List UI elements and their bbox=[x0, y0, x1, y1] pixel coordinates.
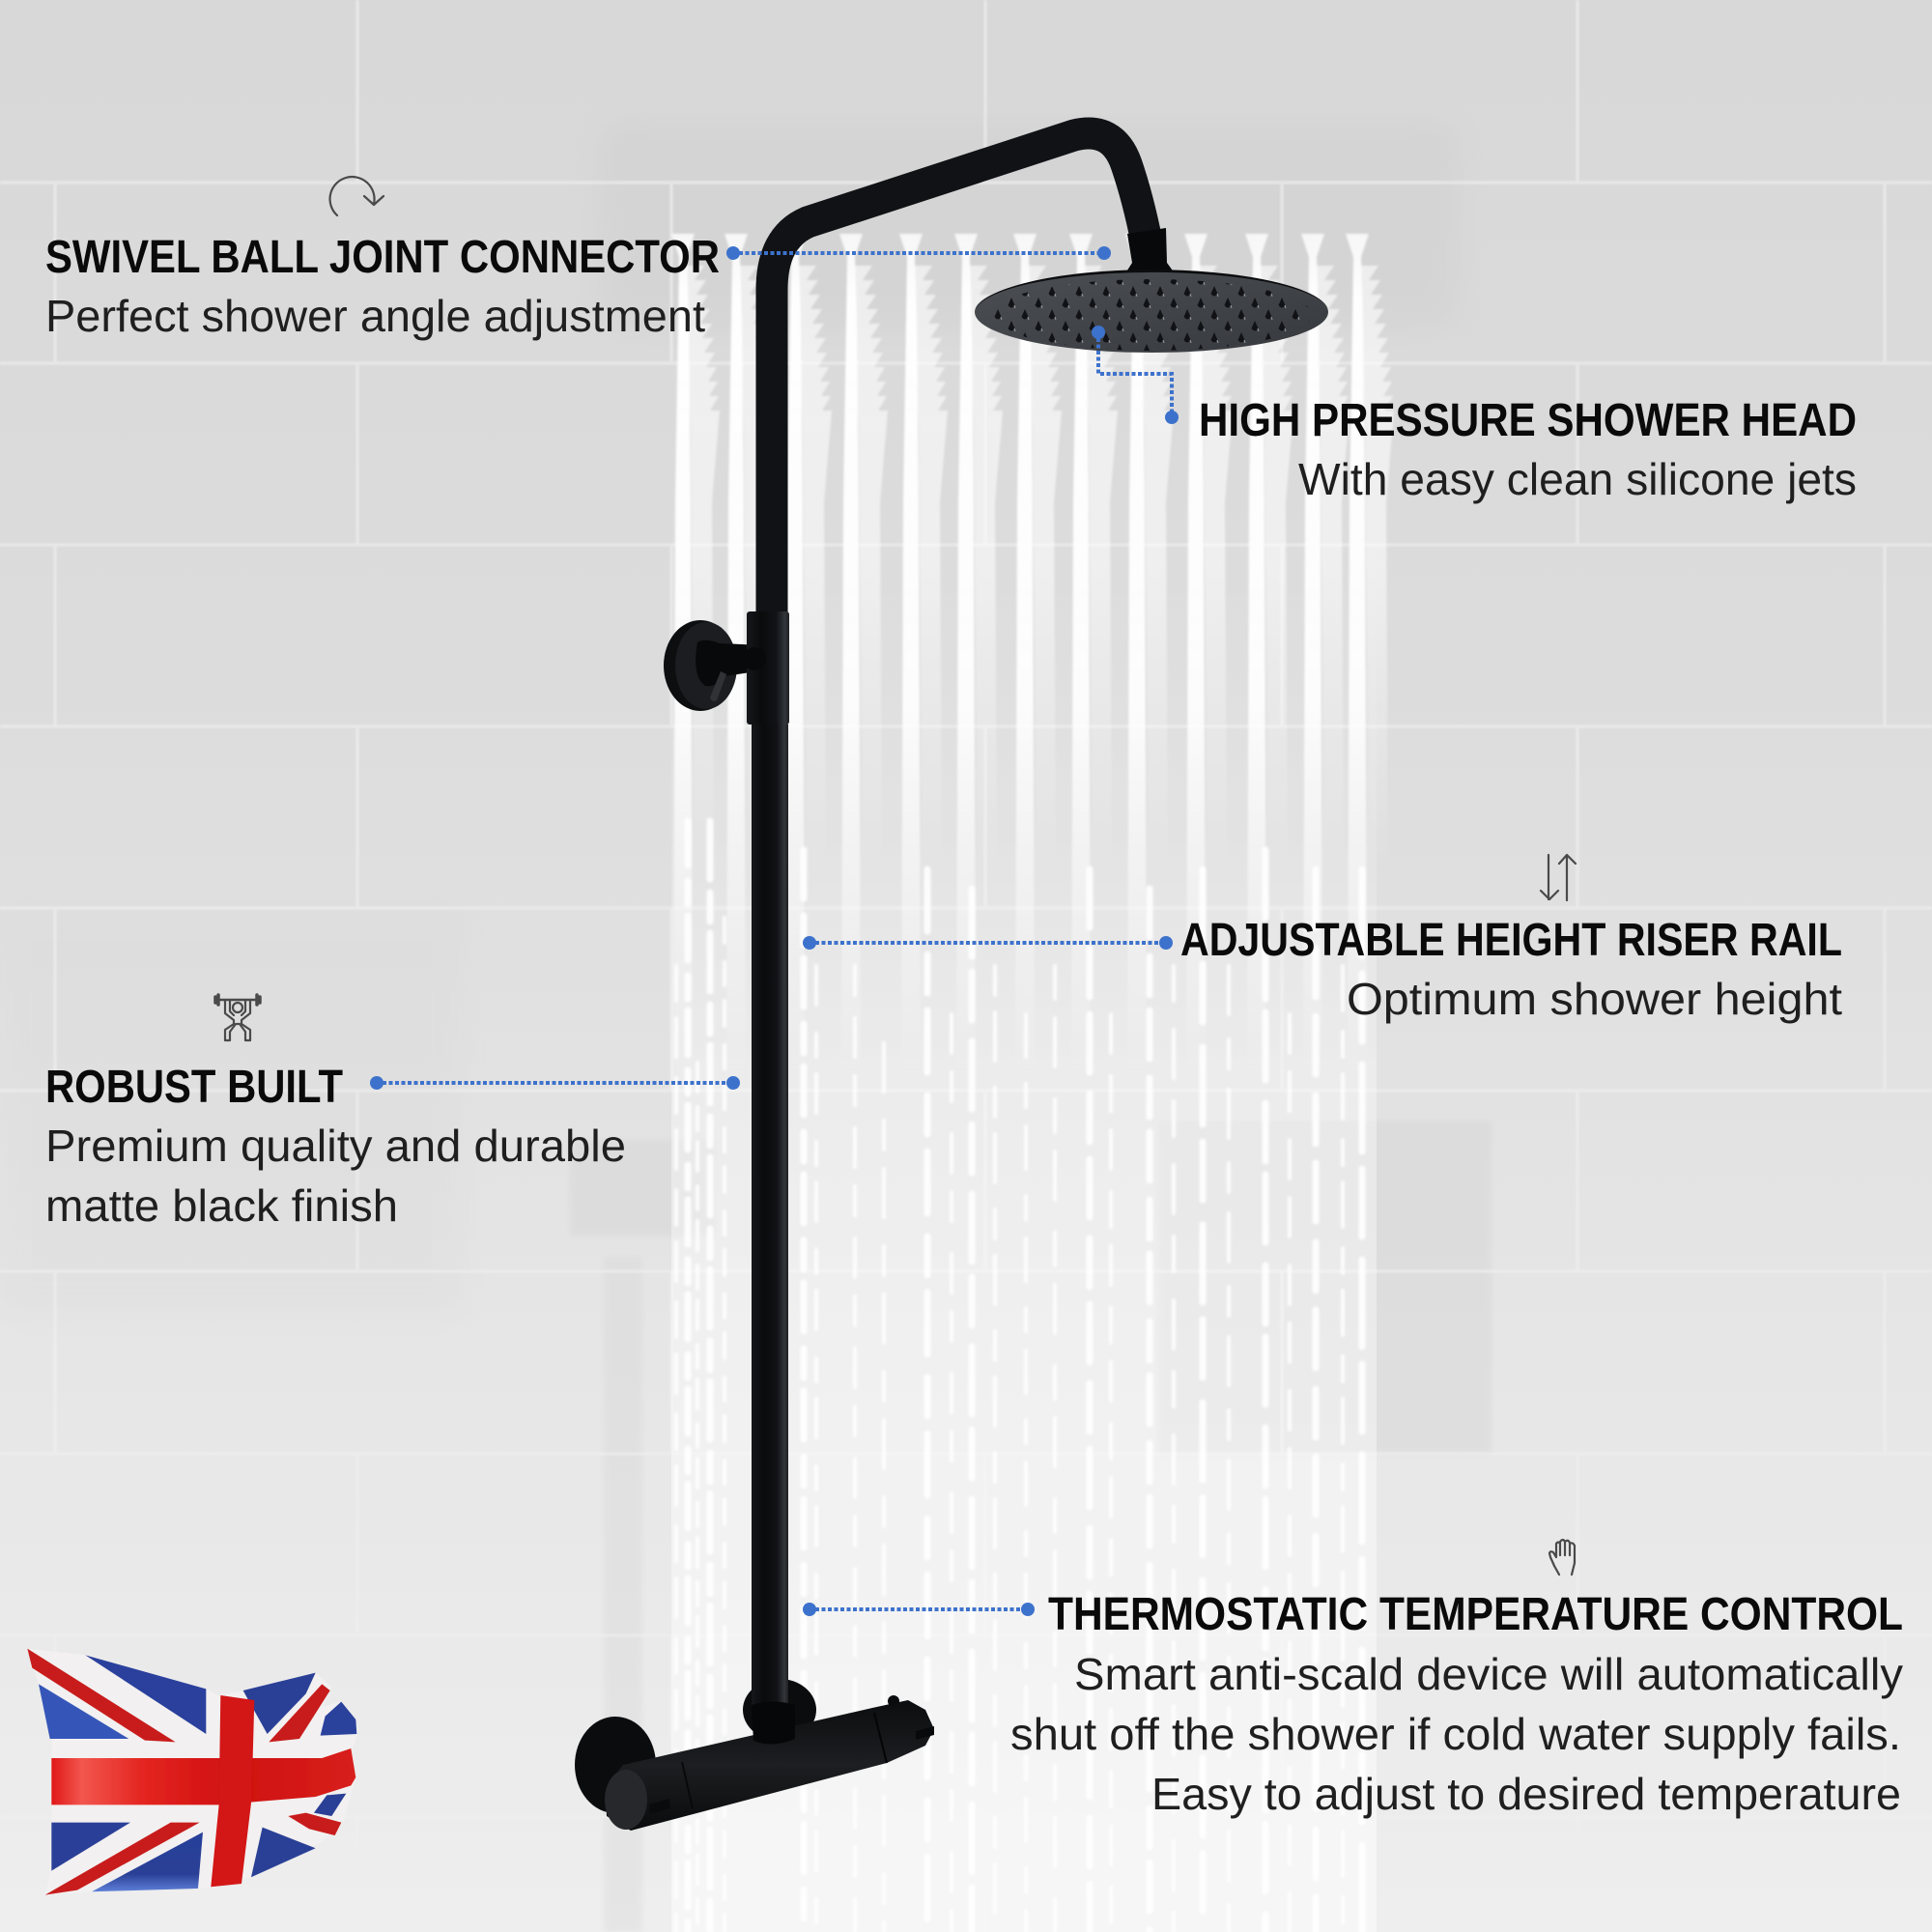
feature: thermostatic temperature control: shut off the shower if cold water supply fails. bbox=[1010, 1709, 1901, 1759]
water: falling shower streams bbox=[671, 234, 1394, 1932]
feature: robust built bbox=[45, 1062, 626, 1231]
icon: swivel arrow bbox=[330, 177, 384, 215]
callout line: thermostatic control bbox=[803, 1603, 1035, 1616]
callout line: riser rail bbox=[803, 936, 1173, 950]
feature: adjustable height riser rail: Optimum shower height bbox=[1347, 974, 1842, 1024]
feature: adjustable height riser rail: ADJUSTABLE HEIGHT RISER RAIL bbox=[1180, 915, 1842, 966]
feature: swivel ball joint connector bbox=[45, 232, 720, 341]
feature: high pressure shower head: HIGH PRESSURE SHOWER HEAD bbox=[1199, 395, 1857, 446]
callout line: robust built bbox=[370, 1076, 740, 1090]
rear valve wall plate bbox=[743, 1679, 816, 1741]
feature: robust built: ROBUST BUILT bbox=[45, 1062, 343, 1113]
callout line: swivel ball joint bbox=[726, 246, 1111, 260]
feature: high pressure shower head bbox=[1199, 395, 1857, 504]
feature: high pressure shower head: With easy clean silicone jets bbox=[1298, 454, 1857, 504]
shower product: matte black riser rail set bbox=[575, 133, 1328, 1831]
thermostatic valve bbox=[575, 1695, 934, 1831]
feature: swivel ball joint connector: Perfect shower angle adjustment bbox=[45, 291, 705, 341]
feature: robust built: matte black finish bbox=[45, 1180, 398, 1231]
feature: robust built: Premium quality and durable bbox=[45, 1121, 626, 1171]
round rain shower head bbox=[975, 270, 1328, 353]
wall bracket bbox=[664, 611, 789, 724]
feature: swivel ball joint connector: SWIVEL BALL JOINT CONNECTOR bbox=[45, 232, 720, 283]
feature: thermostatic temperature control bbox=[1010, 1589, 1903, 1819]
icon: waving UK flag bbox=[27, 1649, 357, 1895]
icon: up and down arrows bbox=[1541, 855, 1576, 900]
icon: weightlifter bbox=[215, 995, 260, 1040]
feature: thermostatic temperature control: Easy to adjust to desired temperature bbox=[1151, 1769, 1901, 1819]
feature: thermostatic temperature control: Smart anti-scald device will automatically bbox=[1074, 1649, 1903, 1699]
callout line: shower head bbox=[1092, 326, 1179, 424]
icon: hand bbox=[1549, 1540, 1575, 1575]
swivel nut and head connector bbox=[1125, 228, 1175, 273]
rail and curved arm bbox=[752, 133, 1147, 1710]
feature: adjustable height riser rail bbox=[1180, 915, 1842, 1024]
